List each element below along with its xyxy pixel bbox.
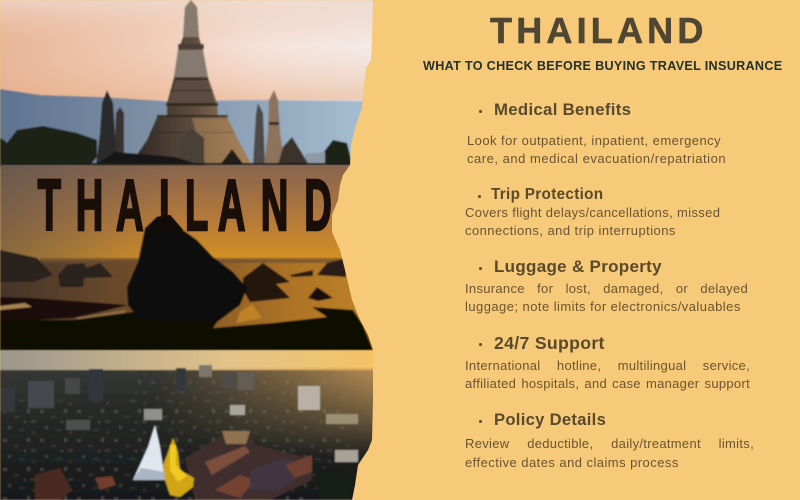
small left prangs <box>112 107 124 165</box>
section: Luggage & Property <box>465 257 748 314</box>
golden Buddha <box>163 438 194 497</box>
middle islands <box>243 263 290 302</box>
central prang <box>138 0 252 165</box>
white pagoda <box>133 425 165 480</box>
trees <box>0 126 97 165</box>
foreground land <box>0 297 128 322</box>
photo: Phang Nga bay sunset <box>0 165 380 351</box>
photo: Bangkok aerial with golden Buddha <box>0 350 380 500</box>
right prangs <box>253 103 265 165</box>
body: medical text <box>467 133 726 166</box>
body: medical text: care, and medical evacuation/repatriation <box>467 151 726 166</box>
body: luggage text: luggage; note limits for electronics/valuables <box>465 299 741 314</box>
trees <box>315 465 355 500</box>
body: trip text: Covers flight delays/cancellations, missed <box>465 205 720 220</box>
heading: Luggage & Property: Luggage & Property <box>494 257 662 276</box>
section: Trip Protection <box>465 186 720 238</box>
foreground shadows <box>90 152 210 168</box>
temple roofs district <box>185 434 312 500</box>
section: Medical Benefits <box>467 100 726 166</box>
section: Policy Details <box>465 410 754 470</box>
body: trip text <box>465 205 720 238</box>
rock overlapping title <box>145 215 183 232</box>
body: luggage text <box>465 281 748 314</box>
panel title: THAILAND <box>490 10 708 51</box>
heading: Medical Benefits: Medical Benefits <box>494 100 631 119</box>
heading: Policy Details: Policy Details <box>494 410 606 429</box>
body: luggage text: Insurance for lost, damaged, or delayed <box>465 281 748 296</box>
bullet markers <box>478 110 482 423</box>
torn paper panel <box>332 0 800 500</box>
heading: 24/7 Support: 24/7 Support <box>494 333 605 353</box>
photo title: THAILAND: THAILAND <box>38 166 332 246</box>
body: medical text: Look for outpatient, inpatient, emergency <box>467 133 721 148</box>
skyline towers <box>89 369 103 401</box>
body: policy text: Review deductible, daily/treatment limits, <box>465 436 754 451</box>
body: policy text: effective dates and claims process <box>465 455 679 470</box>
main rock <box>127 215 247 322</box>
body: support text <box>465 358 750 391</box>
body: support text: International hotline, multilingual service, <box>465 358 750 373</box>
subtitle: WHAT TO CHECK BEFORE BUYING TRAVEL INSURANCE <box>423 59 782 73</box>
section: 24/7 Support <box>465 333 750 391</box>
photo: Wat Arun temple at dusk <box>0 0 380 168</box>
left islands <box>0 250 53 282</box>
body: support text: affiliated hospitals, and case manager support <box>465 376 750 391</box>
body: policy text <box>465 436 754 470</box>
body: trip text: connections, and trip interruptions <box>465 223 676 238</box>
heading: Trip Protection: Trip Protection <box>491 186 603 203</box>
photo collage with torn paper edge <box>0 0 373 500</box>
